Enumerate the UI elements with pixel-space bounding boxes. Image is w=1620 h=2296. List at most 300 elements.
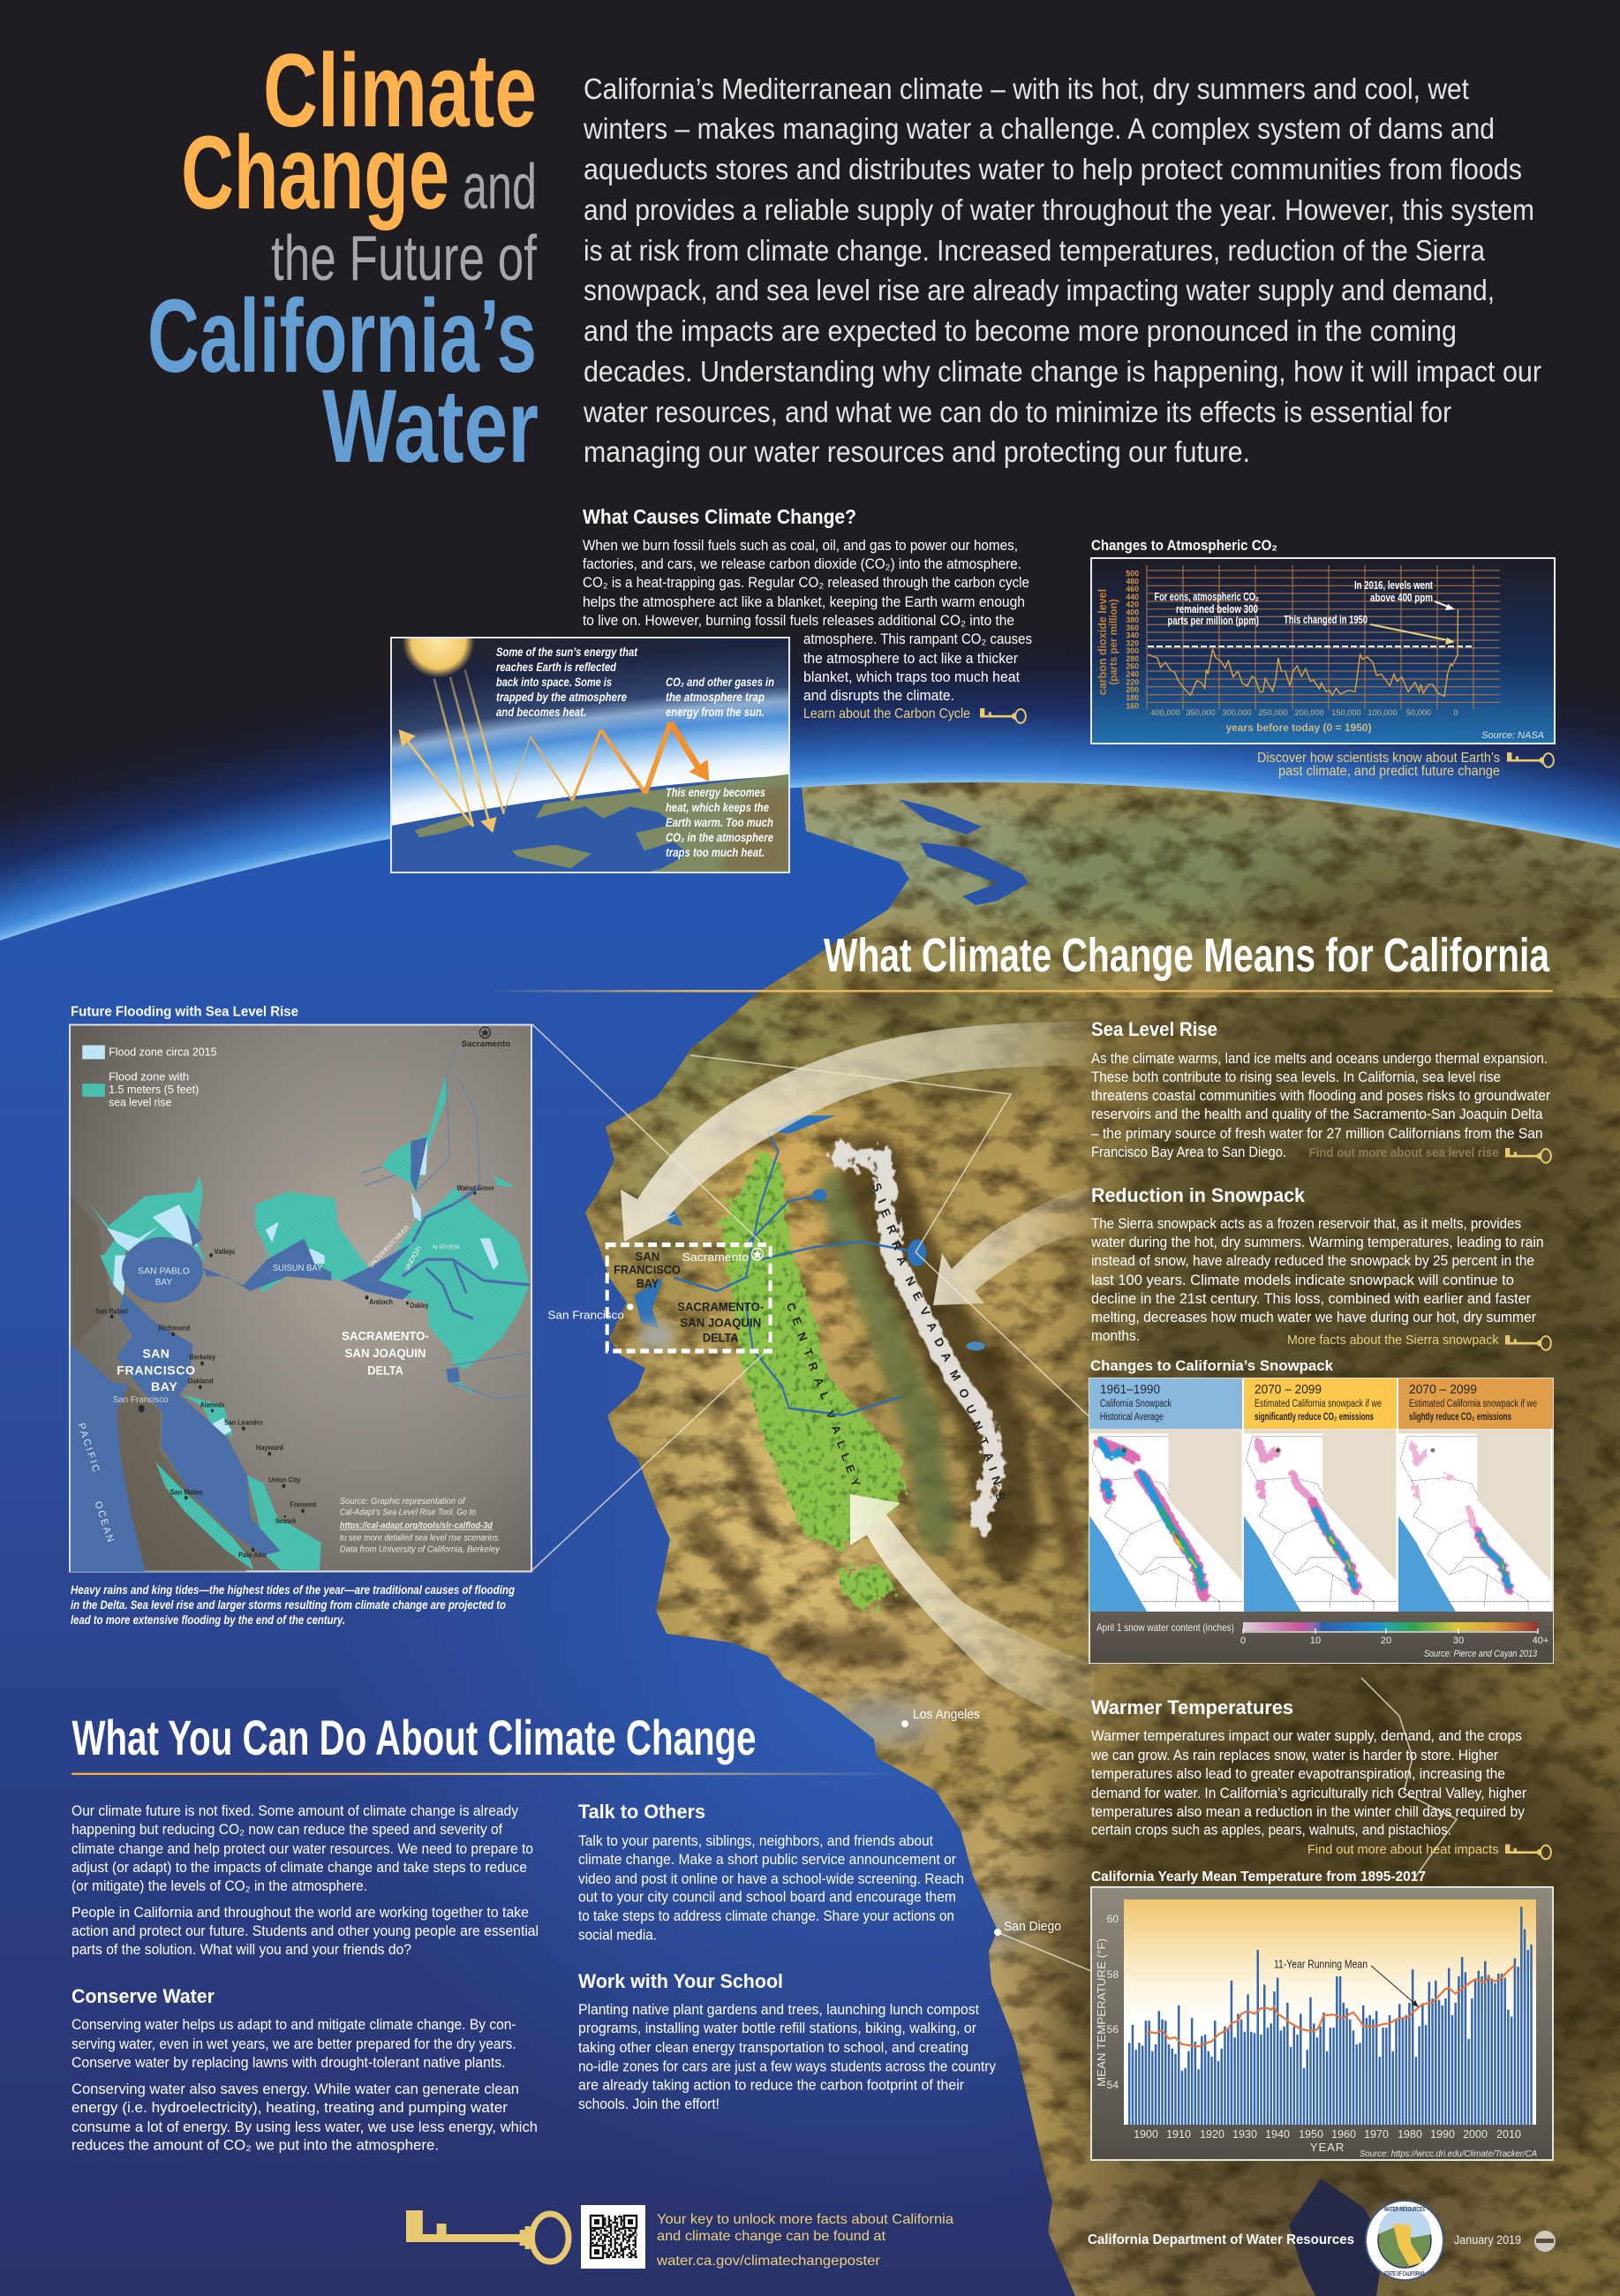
terrain texture xyxy=(530,759,1620,2296)
rivers xyxy=(674,1131,908,1415)
text block: work with your school: Planting native plant gardens and trees, launching lunch compost xyxy=(578,2002,979,2018)
label: San Francisco Bay: BAY xyxy=(637,1277,659,1290)
y axis labels: 240 xyxy=(1126,669,1139,678)
legend: Flood zone circa 2015 xyxy=(109,1046,217,1059)
footer callout: your key: Your key to unlock more facts about California xyxy=(657,2212,953,2227)
y axis labels: 420 xyxy=(1126,600,1139,609)
x axis labels: 0 xyxy=(1453,708,1458,717)
text block: work with your school xyxy=(578,1970,997,2112)
star: Sacramento xyxy=(479,1027,491,1038)
label: Los Angeles xyxy=(901,1707,980,1727)
city labels: Palo Alto xyxy=(238,1552,267,1560)
panel text: reduction in snowpack: The Sierra snowpack acts as a frozen reservoir that, as it melts, provides xyxy=(1091,1216,1521,1232)
link: heat impacts: Find out more about heat impacts xyxy=(1307,1843,1499,1857)
x axis title: YEAR xyxy=(1310,2141,1345,2154)
heat zigzag arrow xyxy=(503,722,699,814)
text block: causes: factories, and cars, we release carbon dioxide (CO₂) into the atmosphere. xyxy=(583,556,1021,572)
label: Central Valley xyxy=(784,1301,863,1489)
label: Delta xyxy=(677,1301,764,1345)
y axis labels: 320 xyxy=(1126,638,1139,647)
label: Sierra Nevada Mountains: I xyxy=(875,1197,889,1205)
x axis ticks: 1970 xyxy=(1364,2128,1389,2141)
label: Sierra Nevada Mountains: N xyxy=(969,1419,985,1432)
reflected arrow xyxy=(404,737,473,827)
x axis ticks: 1940 xyxy=(1265,2128,1290,2141)
water and region labels: N RIVER xyxy=(433,1242,460,1250)
label: San Diego: San Diego xyxy=(1004,1919,1061,1934)
annotation arrows xyxy=(1370,601,1455,645)
panel text: sea level rise: reservoirs and the health and quality of the Sacramento-San Joaquin Delta xyxy=(1091,1106,1543,1122)
northern inlets xyxy=(899,799,1029,905)
y axis title: (parts per million) xyxy=(1109,599,1119,685)
text block: causes: When we burn fossil fuels such as coal, oil, and gas to power our homes, xyxy=(583,538,1018,554)
arrow: sea level rise xyxy=(621,1022,1095,1242)
label: Central Valley: C xyxy=(784,1301,799,1314)
text block: talk to others: to take steps to address climate change. Share your actions on xyxy=(578,1908,954,1924)
annotations: remained below 300 xyxy=(1176,603,1258,616)
x axis labels: 400,000 xyxy=(1150,708,1180,717)
label: Sacramento: Sacramento xyxy=(682,1251,749,1264)
label: Sierra Nevada Mountains: M xyxy=(947,1368,963,1383)
x axis ticks: 1950 xyxy=(1299,2128,1323,2141)
map source note: Data from University of California, Berkeley xyxy=(340,1545,501,1554)
panel text: reduction in snowpack: water during the hot, dry summers. Warming temperatures, leading to rain xyxy=(1090,1235,1544,1250)
text block: causes: the atmosphere to act like a thicker xyxy=(803,651,1018,667)
label: Sierra Nevada Mountains: V xyxy=(917,1305,932,1318)
y axis labels xyxy=(1126,569,1139,710)
intro paragraph xyxy=(583,72,1541,468)
diagram captions: CO₂ and other gases in xyxy=(666,676,774,689)
intro paragraph: water resources, and what we can do to minimize its effects is essential for xyxy=(583,396,1451,428)
x axis labels: 200,000 xyxy=(1294,708,1324,717)
diagram captions: and becomes heat. xyxy=(496,706,586,719)
globe: ocean xyxy=(0,759,1620,2296)
y axis labels: 440 xyxy=(1126,593,1139,601)
city labels: Oakley xyxy=(410,1302,429,1310)
city labels: San Mateo xyxy=(170,1488,203,1496)
y axis labels: 360 xyxy=(1126,623,1139,632)
x axis labels: 50,000 xyxy=(1406,708,1431,717)
column headers: 2070 – 2099 xyxy=(1255,1383,1322,1397)
water and region labels: SAN JOAQUIN xyxy=(345,1347,426,1361)
land in diagram xyxy=(415,774,789,872)
text block: conserve water: Conserve Water xyxy=(72,1985,215,2007)
water and region labels: SAN xyxy=(142,1347,170,1361)
y axis labels: 500 xyxy=(1126,569,1139,578)
color legend: 30 xyxy=(1453,1635,1464,1646)
link: sierra snowpack xyxy=(1287,1333,1551,1350)
text block: talk to others: social media. xyxy=(578,1927,657,1943)
color legend: April 1 snow water content (inches) xyxy=(1096,1621,1234,1634)
panel text: reduction in snowpack: decline in the 21st century. This loss, combined with earlier and faster xyxy=(1091,1291,1531,1307)
text block: work with your school: programs, installing water bottle refill stations, biking, walking, or xyxy=(578,2020,976,2036)
x axis ticks: 1980 xyxy=(1398,2128,1422,2141)
text block: conserve water xyxy=(72,1985,538,2153)
label: Sierra Nevada Mountains: R xyxy=(884,1223,900,1236)
gulf of california xyxy=(1289,2179,1384,2296)
intro paragraph: aqueducts stores and distributes water to help protect communities from floods xyxy=(584,153,1522,185)
sun xyxy=(403,606,474,677)
panel: snowpack maps xyxy=(1089,1378,1553,1663)
panel text: reduction in snowpack: instead of snow, have already reduced the snowpack by 25 percent in the xyxy=(1091,1253,1534,1269)
title: and xyxy=(463,152,537,223)
label: San Francisco: San Francisco xyxy=(547,1310,624,1322)
city labels: Newark xyxy=(275,1517,297,1525)
water and region labels: DELTA xyxy=(367,1363,403,1378)
annotations xyxy=(1155,579,1434,627)
city labels: Richmond xyxy=(158,1325,190,1333)
diagram captions: back into space. Some is xyxy=(496,676,612,689)
text block: causes: atmosphere. This rampant CO₂ causes xyxy=(803,631,1032,647)
water and region labels: SACRAMENTO RIVER xyxy=(366,1223,411,1269)
flood map caption: lead to more extensive flooding by the end of the century. xyxy=(71,1612,345,1627)
text block: conserve water: serving water, even in wet years, we are better prepared for the dry years. xyxy=(72,2036,516,2052)
label: Sierra Nevada Mountains: E xyxy=(878,1206,893,1220)
intro paragraph: decades. Understanding why climate change is happening, how it will impact our xyxy=(584,355,1541,388)
city labels: Alameda xyxy=(200,1401,225,1409)
panel text: sea level rise: These both contribute to rising sea levels. In California, sea level rise xyxy=(1091,1069,1501,1085)
label: San Francisco Bay: FRANCISCO xyxy=(614,1264,681,1277)
city labels: San Leandro xyxy=(224,1418,263,1426)
text block: conserve water: Conserving water helps us adapt to and mitigate climate change. By con- xyxy=(72,2017,516,2033)
heading: yearly temperature chart: California Yearly Mean Temperature from 1895-2017 xyxy=(1091,1869,1426,1884)
water and region labels: BAY xyxy=(155,1278,172,1288)
footer: department name: California Department of Water Resources xyxy=(1088,2232,1354,2247)
annotations: In 2016, levels went xyxy=(1354,579,1434,592)
legend xyxy=(82,1046,217,1109)
x axis ticks: 1900 xyxy=(1134,2128,1158,2141)
label: Sierra Nevada Mountains: I xyxy=(986,1465,999,1473)
title: Change xyxy=(181,115,449,231)
label: Central Valley: L xyxy=(839,1451,854,1462)
delta channels xyxy=(403,1188,530,1318)
map source note: Source: Graphic representation of xyxy=(340,1497,465,1507)
central california map labels xyxy=(547,1181,1007,1502)
panel text: warmer temperatures: demand for water. In California’s agriculturally rich Central Valley, higher xyxy=(1091,1786,1526,1801)
text block: our climate future: People in California and throughout the world are working together to take xyxy=(72,1905,529,1921)
water and region labels: SACRAMENTO- xyxy=(342,1330,429,1344)
x axis ticks: 2000 xyxy=(1463,2128,1488,2141)
text block: conserve water: Conserve water by replacing lawns with drought-tolerant native plants. xyxy=(72,2055,506,2071)
intro paragraph: snowpack, and sea level rise are already impacting water supply and demand, xyxy=(584,274,1495,306)
los angeles urban area xyxy=(830,1701,1015,1950)
text block: work with your school: no-idle zones for cars are just a few ways students across the country xyxy=(578,2059,997,2075)
label: Central Valley: E xyxy=(789,1315,805,1327)
map: 1961-1990 xyxy=(1089,1429,1242,1612)
solar rays xyxy=(434,669,504,827)
panel text: sea level rise: – the primary source of fresh water for 27 million Californians from the San xyxy=(1091,1126,1543,1142)
y axis labels: 260 xyxy=(1126,662,1139,671)
text block: work with your school: are already taking action to reduce the carbon footprint of their xyxy=(578,2077,964,2093)
CO2 curve xyxy=(1148,609,1458,696)
footer: date: January 2019 xyxy=(1454,2232,1521,2247)
y axis labels: 280 xyxy=(1126,654,1139,663)
heading: What Causes Climate Change?: What Causes Climate Change? xyxy=(583,505,856,528)
label: Sierra Nevada Mountains: A xyxy=(924,1319,940,1334)
diagram captions xyxy=(496,646,774,859)
icon: department seal: WATER RESOURCES xyxy=(1384,2205,1425,2213)
y axis ticks xyxy=(1107,1913,1119,2091)
label: Central Valley: R xyxy=(806,1360,821,1373)
text block: our climate future: adjust (or adapt) to the impacts of climate change and take steps to reduce xyxy=(72,1860,527,1876)
title: California’s xyxy=(147,278,537,395)
11-year running mean line xyxy=(1146,1965,1515,2047)
chart source: Source: https://wrcc.dri.edu/Climate/Tracker/CA xyxy=(1360,2149,1537,2159)
intro paragraph: managing our water resources and protecting our future. xyxy=(584,435,1250,468)
globe: land and terrain of California xyxy=(530,759,1620,2296)
text block: talk to others: Talk to Others xyxy=(578,1801,705,1823)
label: Los Angeles: Los Angeles xyxy=(913,1707,980,1722)
panel text: reduction in snowpack: melting, decreases how much water we have during our hot, dry summer xyxy=(1091,1310,1536,1325)
color legend: 10 xyxy=(1310,1635,1321,1646)
y axis ticks: 58 xyxy=(1107,1968,1119,1981)
label: Sierra Nevada Mountains: A xyxy=(894,1254,910,1268)
x axis ticks: 1930 xyxy=(1232,2128,1257,2141)
city labels: San Francisco xyxy=(113,1395,169,1405)
water and region labels: BAY xyxy=(151,1380,177,1394)
label: Sierra Nevada Mountains xyxy=(870,1181,1007,1502)
label: Sierra Nevada Mountains: U xyxy=(963,1402,979,1416)
diagram captions: heat, which keeps the xyxy=(666,801,769,814)
water and region labels: SAN JOAQUIN xyxy=(403,1244,423,1273)
x axis ticks: 1920 xyxy=(1200,2128,1224,2141)
column headers: 1961–1990 xyxy=(1100,1383,1160,1397)
x axis title: years before today (0 = 1950) xyxy=(1225,721,1372,734)
heading: Changes to California's Snowpack: Changes to California’s Snowpack xyxy=(1090,1357,1334,1374)
y axis labels: 460 xyxy=(1126,585,1139,593)
label: Delta: DELTA xyxy=(703,1332,739,1345)
x axis ticks: 2010 xyxy=(1496,2128,1521,2141)
x axis labels: 300,000 xyxy=(1222,708,1252,717)
city labels: San Rafael xyxy=(95,1307,128,1315)
icon: San Francisco dot xyxy=(627,1303,634,1310)
heading: Changes to Atmospheric CO2: Changes to Atmospheric CO₂ xyxy=(1091,537,1277,554)
panel: flood map xyxy=(70,1024,531,1572)
text block: work with your school: taking other clean energy transportation to school, and creating xyxy=(578,2040,968,2056)
annotations: This changed in 1950 xyxy=(1284,614,1368,626)
label: Central Valley: A xyxy=(811,1376,827,1388)
y axis title: carbon dioxide level xyxy=(1096,589,1109,695)
column headers: Estimated California snowpack if we xyxy=(1409,1399,1537,1409)
label: Sierra Nevada Mountains: S xyxy=(870,1181,885,1194)
background: night sky with atmosphere glow xyxy=(0,0,1620,971)
diagram captions: Some of the sun’s energy that xyxy=(496,646,637,659)
western land shading xyxy=(71,1196,247,1572)
label: Central Valley: T xyxy=(801,1347,816,1358)
column headers: significantly reduce CO₂ emissions xyxy=(1255,1412,1374,1423)
text block: our climate future xyxy=(72,1803,539,1958)
label: Sierra Nevada Mountains: E xyxy=(910,1289,925,1303)
bay water xyxy=(117,1137,427,1555)
label: Sierra Nevada Mountains: N xyxy=(903,1274,918,1288)
legend: Flood zone with xyxy=(109,1069,189,1083)
source: Source: NASA xyxy=(1481,730,1544,741)
label: Sierra Nevada Mountains: N xyxy=(989,1475,1004,1486)
annotations: parts per million (ppm) xyxy=(1167,615,1259,627)
y axis labels: 160 xyxy=(1126,701,1139,710)
dashed box: delta area xyxy=(607,1245,771,1351)
label: San Francisco Bay: SAN xyxy=(636,1250,659,1263)
footer callout: your key: and climate change can be found at xyxy=(657,2229,886,2244)
text block: our climate future: Our climate future is not fixed. Some amount of climate change is already xyxy=(72,1803,519,1819)
y axis labels: 400 xyxy=(1126,608,1139,616)
city labels: Sacramento xyxy=(462,1039,510,1049)
label: Central Valley: L xyxy=(818,1390,833,1401)
footer callout: your key: water.ca.gov/climatechangeposter xyxy=(656,2254,881,2269)
panel text: warmer temperatures: certain crops such as apples, pears, walnuts, and pistachios. xyxy=(1091,1823,1451,1839)
panel text: warmer temperatures: temperatures also mean a reduction in the winter chill days required by xyxy=(1091,1804,1526,1820)
diagram captions: traps too much heat. xyxy=(666,846,765,859)
connector lines from map to panels xyxy=(532,1024,1457,1971)
text block: conserve water: Conserving water also saves energy. While water can generate clean xyxy=(72,2081,519,2097)
label: Delta: SACRAMENTO- xyxy=(677,1301,764,1314)
city labels: Fremont xyxy=(290,1501,316,1509)
diagram captions: CO₂ in the atmosphere xyxy=(666,831,773,844)
section heading: What You Can Do: What You Can Do About Climate Change xyxy=(72,1710,756,1765)
city labels: Oakland xyxy=(188,1377,214,1385)
label: Central Valley: E xyxy=(843,1463,858,1475)
ocean xyxy=(71,1344,146,1572)
color legend: 40+ xyxy=(1533,1635,1548,1646)
icon: large key xyxy=(406,2210,569,2262)
text block: causes: CO₂ is a heat-trapping gas. Regular CO₂ released through the carbon cycle xyxy=(583,575,1029,591)
pacific ocean label: PACIFIC xyxy=(75,1422,102,1473)
diagram captions: This energy becomes xyxy=(666,786,765,799)
arrow: reduction in snowpack xyxy=(933,1183,1095,1305)
text block: our climate future: happening but reducing CO₂ now can reduce the speed and severity of xyxy=(72,1822,502,1838)
city labels: Hayward xyxy=(256,1444,283,1452)
city labels: Berkeley xyxy=(190,1354,216,1362)
color legend: 20 xyxy=(1381,1635,1391,1646)
label: San Francisco Bay xyxy=(614,1250,681,1290)
panel text: reduction in snowpack: last 100 years. Climate models indicate snowpack will continue to xyxy=(1091,1273,1514,1288)
link: carbon cycle: Learn about the Carbon Cycle xyxy=(803,706,970,721)
panel text: sea level rise: Sea Level Rise xyxy=(1091,1018,1217,1040)
text panel darkening xyxy=(1042,998,1620,2296)
text block: our climate future: (or mitigate) the levels of CO₂ in the atmosphere. xyxy=(72,1878,367,1894)
title: the Future of xyxy=(271,223,538,294)
heading: Future Flooding: Future Flooding with Sea Level Rise xyxy=(71,1005,298,1019)
link: past climate: Discover how scientists know about Earth’s xyxy=(1257,751,1500,766)
panel text: warmer temperatures: temperatures also lead to greater evapotranspiration, increasing the xyxy=(1091,1766,1505,1782)
flood zone 2015 light xyxy=(107,1137,499,1437)
map: significant CO2 reduction xyxy=(1244,1429,1396,1612)
label: Central Valley: Y xyxy=(848,1477,863,1489)
map: slight CO2 reduction xyxy=(1398,1429,1550,1612)
y axis labels: 220 xyxy=(1126,677,1139,686)
water and region labels: FRANCISCO xyxy=(117,1363,195,1378)
text block: conserve water: consume a lot of energy. By using less water, we use less energy, which xyxy=(72,2119,538,2135)
title: Water xyxy=(322,368,539,485)
chart: atmospheric CO2 xyxy=(1091,558,1555,744)
text block: our climate future: climate change and help protect our water resources. We need to prepare to xyxy=(72,1841,533,1857)
lakes and delta xyxy=(634,1115,836,1329)
icon: state capital star xyxy=(751,1249,763,1260)
label: Delta: SAN JOAQUIN xyxy=(680,1316,761,1329)
diagram captions: reaches Earth is reflected xyxy=(496,661,617,674)
column headers xyxy=(1089,1378,1553,1429)
y axis labels: 180 xyxy=(1126,693,1139,702)
intro paragraph: is at risk from climate change. Increased temperatures, reduction of the Sierra xyxy=(584,234,1486,267)
text block: causes xyxy=(583,538,1032,704)
text block: talk to others: climate change. Make a short public service announcement or xyxy=(578,1852,956,1868)
flood map caption: in the Delta. Sea level rise and larger storms resulting from climate change are projected to xyxy=(71,1597,506,1612)
x axis ticks: 1910 xyxy=(1166,2128,1191,2141)
water and region labels: SUISUN BAY xyxy=(273,1264,322,1273)
y axis ticks: 60 xyxy=(1107,1913,1119,1925)
running mean callout: 11-Year Running Mean xyxy=(1274,1959,1368,1971)
city labels: Antioch xyxy=(369,1298,393,1306)
diagram captions: energy from the sun. xyxy=(666,706,765,719)
city labels: Vallejo xyxy=(214,1248,235,1256)
pacific ocean label xyxy=(75,1422,116,1544)
text block: talk to others: out to your city council and school board and encourage them xyxy=(578,1890,956,1906)
pacific ocean label: OCEAN xyxy=(93,1500,116,1544)
x axis labels: 350,000 xyxy=(1186,708,1216,717)
link: past climate: past climate, and predict future change xyxy=(1278,764,1500,779)
y axis labels: 340 xyxy=(1126,631,1139,640)
running mean callout xyxy=(1274,1959,1419,2007)
column headers: 2070 – 2099 xyxy=(1409,1383,1477,1397)
intro paragraph: California’s Mediterranean climate – with its hot, dry summers and cool, wet xyxy=(584,72,1469,105)
panel text: reduction in snowpack xyxy=(1090,1184,1544,1344)
y axis ticks: 54 xyxy=(1107,2079,1119,2091)
y axis title xyxy=(1096,589,1119,695)
threshold dashed line xyxy=(1148,646,1473,647)
label: Sierra Nevada Mountains: A xyxy=(938,1350,954,1364)
diagram captions: trapped by the atmosphere xyxy=(496,691,627,704)
y axis title: MEAN TEMPERATURE (°F) xyxy=(1096,1938,1108,2087)
text block: conserve water: reduces the amount of CO₂ we put into the atmosphere. xyxy=(72,2137,439,2153)
panel text: warmer temperatures: we can grow. As rain replaces snow, water is harder to store. Higher xyxy=(1090,1748,1498,1764)
intro paragraph: and provides a reliable supply of water throughout the year. However, this system xyxy=(584,193,1534,226)
ridges, valley and sierra xyxy=(634,999,1074,1651)
flood zone 1.5m hatched xyxy=(88,1074,530,1570)
city dots xyxy=(110,1191,476,1552)
chart: yearly mean temperature xyxy=(1091,1887,1553,2160)
panel text: warmer temperatures: Warmer temperatures impact our water supply, demand, and the crops xyxy=(1091,1728,1522,1744)
map source note: https://cal-adapt.org/tools/slr-calflod-3d xyxy=(340,1522,493,1531)
text block: causes: to live on. However, burning fossil fuels releases additional CO₂ into the xyxy=(583,613,1014,629)
label: Sierra Nevada Mountains: A xyxy=(981,1450,997,1463)
city labels: Walnut Grove xyxy=(457,1184,494,1192)
city labels xyxy=(95,1039,510,1560)
icon: department seal xyxy=(1366,2201,1443,2280)
icon: small logo xyxy=(1534,2231,1556,2252)
title xyxy=(147,33,539,485)
water and region labels: SAN PABLO xyxy=(138,1267,190,1277)
y axis ticks: 56 xyxy=(1107,2023,1119,2035)
column headers: Historical Average xyxy=(1100,1412,1164,1423)
x axis ticks: 1990 xyxy=(1430,2128,1455,2141)
text block: our climate future: parts of the solution. What will you and your friends do? xyxy=(72,1942,411,1958)
diagram captions: the atmosphere trap xyxy=(666,691,765,704)
column headers: California Snowpack xyxy=(1100,1399,1172,1409)
map source note xyxy=(340,1497,501,1554)
panel text: warmer temperatures: Warmer Temperatures xyxy=(1091,1696,1293,1718)
color legend: Source: Pierce and Cayan 2013 xyxy=(1424,1649,1538,1659)
label: Sierra Nevada Mountains: D xyxy=(931,1335,947,1349)
text block: work with your school: schools. Join the effort! xyxy=(578,2096,720,2112)
footer callout: your key xyxy=(656,2212,953,2269)
label: Central Valley: A xyxy=(829,1424,844,1437)
intro paragraph: winters – makes managing water a challenge. A complex system of dams and xyxy=(583,112,1495,145)
text block: our climate future: action and protect our future. Students and other young people are essential xyxy=(72,1923,539,1939)
x axis labels: 150,000 xyxy=(1331,708,1361,717)
text block: conserve water: energy (i.e. hydroelectricity), heating, treating and pumping water xyxy=(72,2100,509,2116)
text block: work with your school: Work with Your School xyxy=(578,1970,783,1992)
x axis ticks xyxy=(1134,2128,1521,2141)
